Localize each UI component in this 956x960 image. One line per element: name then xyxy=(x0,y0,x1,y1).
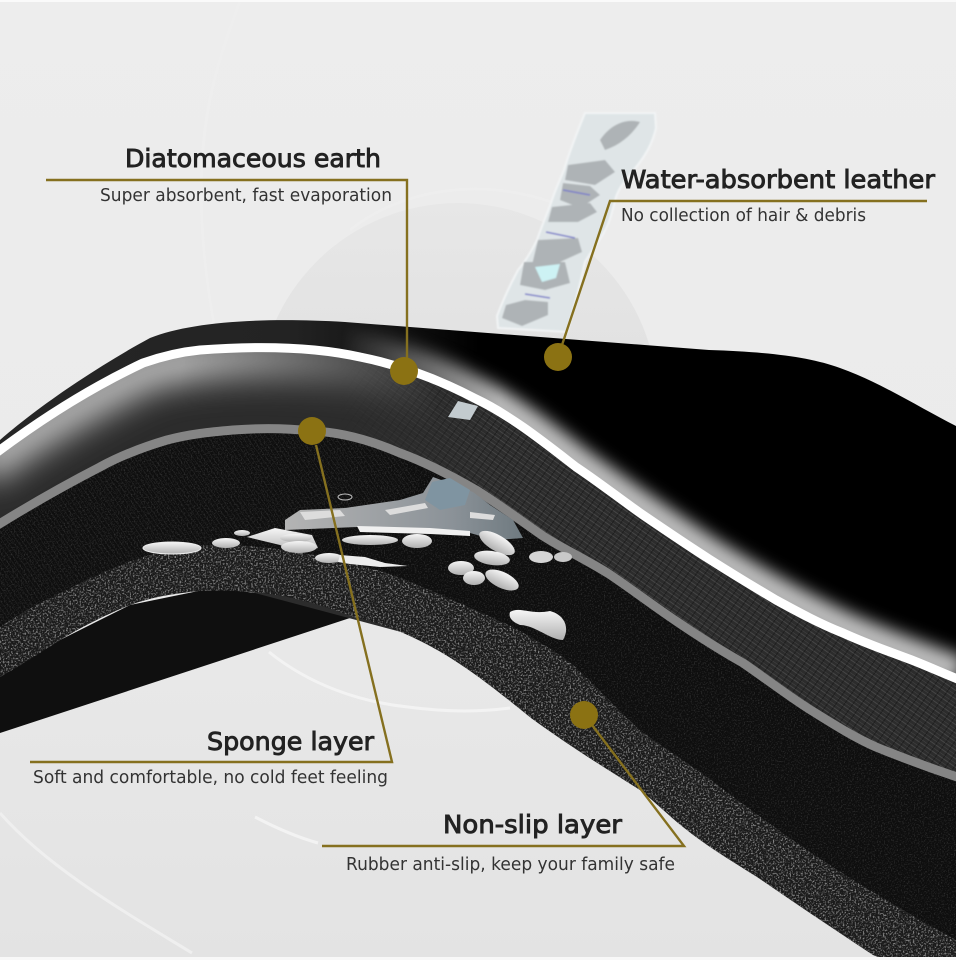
water stream xyxy=(497,113,656,332)
layer: sponge grey line xyxy=(0,429,956,778)
callout: sponge layer xyxy=(30,417,392,788)
callout: water-absorbent leather xyxy=(544,165,936,371)
layer: water-absorbent leather xyxy=(0,320,956,680)
leather grey edge shading xyxy=(340,345,956,672)
callout: diatomaceous earth xyxy=(46,144,418,385)
layer: non-slip foam xyxy=(0,545,956,957)
water splash and droplets xyxy=(143,477,572,640)
heading: non-slip layer: Non-slip layer xyxy=(443,810,623,839)
text: water-absorbent leather description: No collection of hair & debris xyxy=(621,205,866,226)
heading: diatomaceous earth: Diatomaceous earth xyxy=(125,144,381,173)
layer: diatomaceous earth underside xyxy=(0,348,956,780)
heading: water-absorbent leather: Water-absorbent leather xyxy=(621,165,936,194)
text: diatomaceous earth description: Super absorbent, fast evaporation xyxy=(100,185,392,206)
water shard under stripe xyxy=(448,401,478,420)
bottom black backing xyxy=(0,588,353,733)
text: sponge layer description: Soft and comfortable, no cold feet feeling xyxy=(33,767,388,788)
layer: sponge interior xyxy=(0,429,956,950)
white stripe of diatomaceous earth xyxy=(0,348,956,680)
text: non-slip layer description: Rubber anti-slip, keep your family safe xyxy=(346,854,675,875)
heading: sponge layer: Sponge layer xyxy=(207,727,375,756)
callout: non-slip layer xyxy=(322,701,684,875)
